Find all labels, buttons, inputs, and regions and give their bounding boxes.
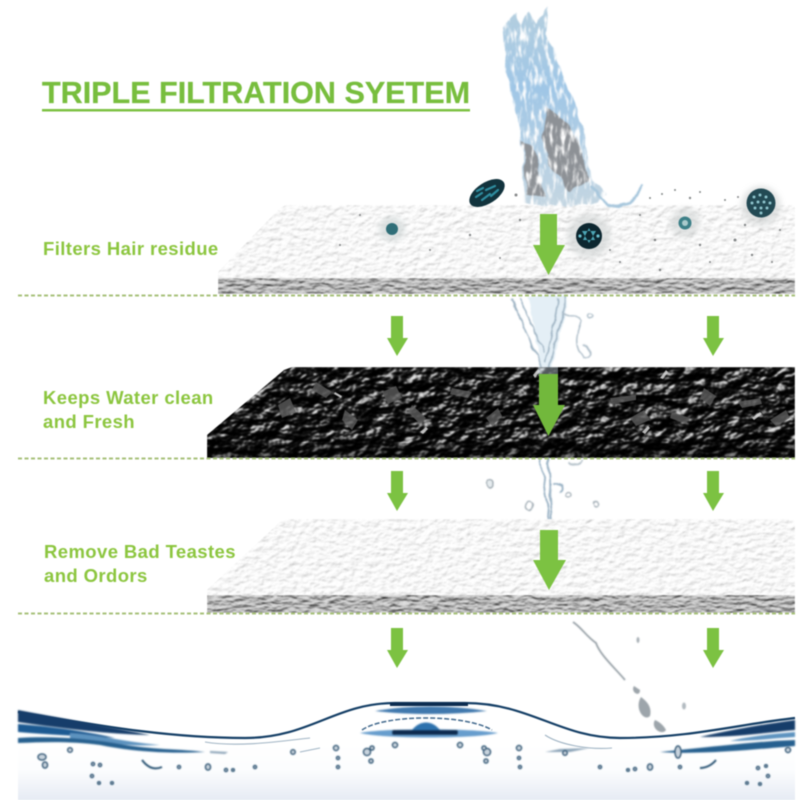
dashed divider 3 [18,612,795,614]
contaminant: large spore [741,186,781,226]
arrow: right row 2 [703,471,724,511]
water jet splash tail [590,184,642,206]
label: layer 2: Keeps Water clean [43,387,214,408]
arrow: left row 2 [387,471,408,511]
water stream between layers 1 and 2 [512,296,592,372]
label: layer 3: and Ordors [44,565,148,586]
arrow: left row 3 [387,628,408,668]
arrow: left row 1 [387,316,408,356]
contaminant: small spore [670,208,700,238]
water jet [503,8,606,205]
filter layer 3: white cotton [207,519,795,613]
contaminant: pill bacterium [379,173,509,241]
contaminants on layer 1 [339,173,781,271]
contaminant: dark spore [567,214,611,258]
label: layer 2: and Fresh [43,411,135,432]
water stream below layer 3 [573,622,686,732]
arrow: right row 3 [703,628,724,668]
dashed divider 2 [18,458,795,460]
water stream below layer 2 [488,458,600,528]
arrow: center layer 3 [533,530,566,590]
label: layer 3 [44,541,236,586]
arrow: right row 1 [703,316,724,356]
water surface [18,702,795,800]
label: layer 3: Remove Bad Teastes [44,541,236,562]
dashed divider 1 [18,294,795,296]
filter layer 2: activated carbon [207,367,795,458]
label: layer 2 [43,387,214,432]
dirt specks [339,189,781,271]
label: layer 1: Filters Hair residue [43,238,219,259]
arrow: center layer 1 [533,214,565,275]
bubbles [38,742,790,785]
arrow: center layer 2 [533,374,565,436]
filter layer 1: white cotton [218,205,795,294]
title: TRIPLE FILTRATION SYETEM [42,75,470,110]
